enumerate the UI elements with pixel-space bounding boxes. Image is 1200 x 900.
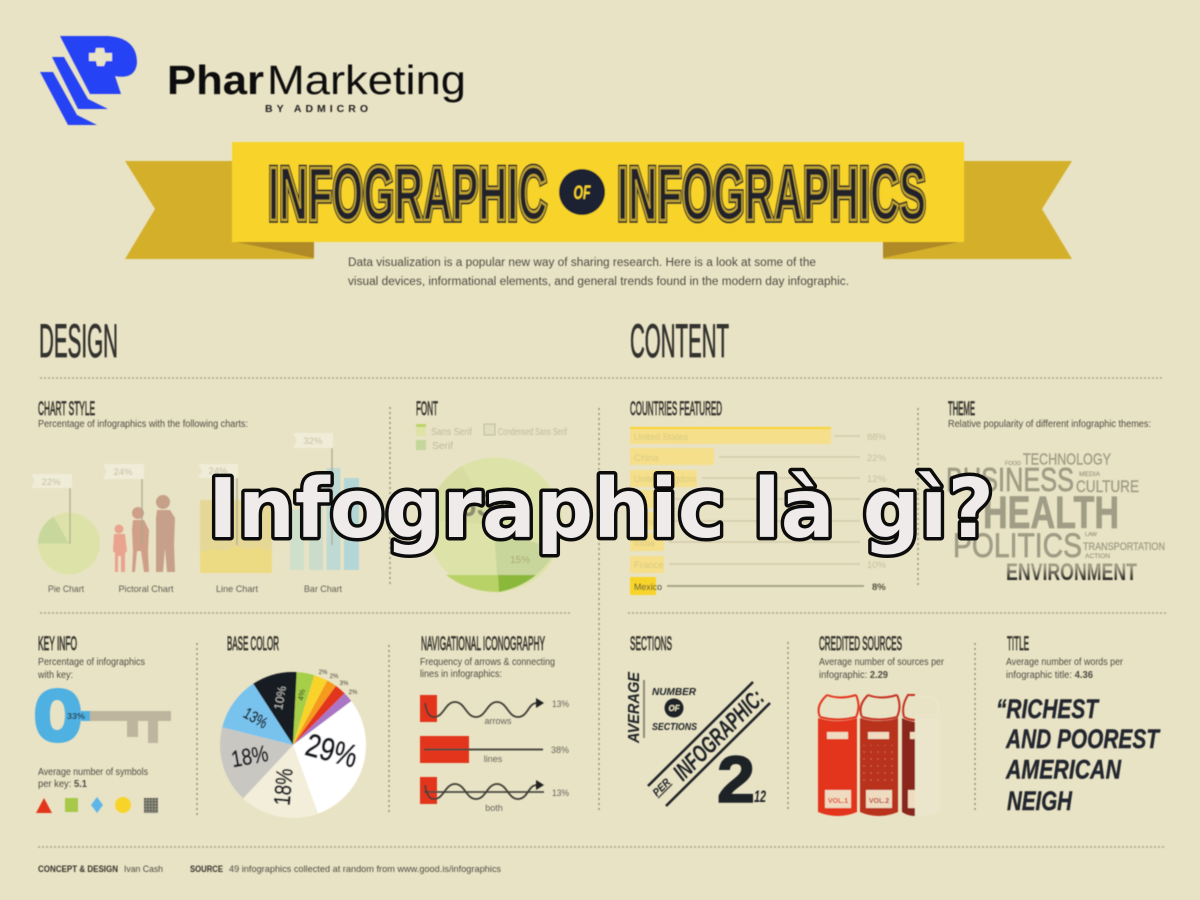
footer credits: Ivan Cash (124, 864, 163, 875)
bar: Canada: Canada (634, 517, 668, 528)
bar: Mexico: Mexico (634, 582, 662, 593)
bar: United States (630, 427, 887, 444)
line chart icon (198, 464, 272, 595)
icon: book vol 1: VOL.1 (828, 798, 848, 805)
bar chart icon: 32% (303, 436, 323, 447)
footer credits: 49 infographics collected at random from www.good.is/infographics (229, 864, 501, 875)
footer credits: CONCEPT & DESIGN (38, 864, 118, 875)
logo mark: PharMarketing (40, 36, 137, 125)
both row: both (485, 803, 503, 813)
panel: chart style: Percentage of infographics with the following charts: (38, 419, 248, 430)
icon: book vol 3 cut off (902, 695, 915, 816)
bar: India: India (634, 538, 655, 549)
icon: key: 33% (67, 712, 85, 721)
bar: hidden row (630, 490, 860, 508)
panel: credited sources: infographic: 2.29 (819, 670, 888, 681)
bar: China (630, 448, 887, 465)
bar: India (630, 533, 887, 551)
logo wordmark (167, 57, 466, 115)
bar: France (630, 556, 887, 573)
panel: key info: Average number of symbols (38, 767, 148, 778)
panel: chart style: CHART STYLE (38, 399, 95, 420)
pie chart icon (31, 474, 100, 595)
lines row: 38% (551, 745, 570, 756)
pie chart icon: 22% (41, 477, 61, 488)
base color pie chart: 18% (269, 767, 298, 806)
panel: font: FONT (416, 399, 438, 420)
bar: India: 10% (867, 538, 887, 549)
pictorial chart icon: Pictoral Chart (118, 584, 174, 595)
infographic artwork: CONTENT (630, 314, 729, 367)
panel: navigational iconography: Frequency of arrows & connecting (420, 657, 555, 668)
panel: theme word cloud: FOOD (1005, 461, 1021, 467)
panel: theme word cloud: CULTURE (1076, 477, 1139, 496)
typographic lockup: average sections: AVERAGE (626, 671, 643, 744)
bar: Mexico: 8% (872, 582, 886, 593)
panel: base color: BASE COLOR (227, 634, 279, 655)
font legend: Sans Serif (431, 427, 472, 438)
bar chart icon: Bar Chart (304, 584, 342, 595)
panel: key info: with key: (37, 670, 73, 681)
arrows row (420, 695, 569, 726)
bar: Mexico (630, 577, 886, 595)
typographic lockup: average sections (626, 671, 770, 816)
pie chart icon: Pie Chart (48, 584, 84, 595)
pictorial chart icon (103, 464, 175, 595)
panel: theme word cloud: HEALTH (983, 487, 1119, 538)
base color pie chart: 29% (302, 726, 361, 775)
footer credits (38, 864, 501, 875)
bar: France: 10% (867, 560, 887, 571)
overlay headline: Infographic là gì? (208, 462, 994, 557)
footer credits: SOURCE (190, 864, 223, 875)
bar: Canada (630, 512, 860, 530)
panel: navigational iconography: lines in infographics: (420, 669, 502, 680)
panel: theme word cloud: Relative popularity of different infographic themes: (948, 419, 1151, 430)
base color pie chart: 2% (330, 674, 339, 680)
intro text: visual devices, informational elements, and general trends found in the modern day infographic. (348, 276, 849, 288)
font legend (416, 424, 567, 452)
panel: theme word cloud: TECHNOLOGY (1023, 452, 1111, 468)
typographic lockup: average sections: .12 (751, 787, 766, 806)
bar: United States: 88% (867, 432, 887, 443)
icon: book vol 1 (818, 695, 858, 816)
line chart icon: Line Chart (216, 584, 258, 595)
panel: sections: SECTIONS (630, 634, 672, 655)
panel: base color (220, 634, 366, 818)
quote: AND POOREST (1005, 724, 1161, 754)
panel: key info: per key: 5.1 (38, 779, 87, 790)
logo wordmark: Phar (167, 57, 264, 103)
bar: United Kingdom: United Kingdom (634, 474, 696, 485)
base color pie chart: 13% (240, 705, 270, 732)
font pie chart: 15% (510, 555, 530, 566)
quote (996, 694, 1161, 816)
title: Infographic of Infographics: INFOGRAPHIC (268, 152, 547, 237)
font legend: Condensed Sans Serif (498, 427, 567, 438)
panel: key info: KEY INFO (38, 634, 77, 655)
typographic lockup: average sections: 2 (717, 742, 755, 816)
base color pie chart: 2% (349, 690, 358, 696)
quote: “RICHEST (996, 694, 1100, 724)
panel: theme word cloud: THEME (948, 399, 975, 420)
base color pie chart: 4% (296, 688, 307, 701)
lines row: lines (484, 754, 503, 764)
font pie chart: 65% (460, 487, 520, 523)
base color pie chart: 2% (319, 670, 328, 676)
panel: key info (35, 634, 171, 813)
intro text (348, 257, 849, 288)
base color pie chart: 18% (229, 740, 270, 772)
logo wordmark: Marketing (267, 57, 466, 103)
panel: title words: TITLE (1007, 634, 1029, 655)
panel: theme word cloud (946, 399, 1165, 586)
font pie chart (428, 458, 562, 592)
logo wordmark: BY ADMICRO (265, 103, 368, 115)
panel: theme word cloud: ENVIRONMENT (1006, 559, 1137, 586)
typographic lockup: average sections: SECTIONS (652, 722, 697, 733)
panel: theme word cloud: BUSINESS (946, 461, 1074, 498)
panel: countries featured (630, 399, 887, 595)
panel: chart style (31, 399, 359, 595)
panel: theme word cloud: POLITICS (953, 527, 1082, 565)
panel: theme word cloud: ACTION (1085, 554, 1110, 560)
panel: sections (626, 634, 770, 816)
title: Infographic of Infographics: INFOGRAPHICS (617, 152, 926, 237)
pictorial chart icon: 24% (113, 467, 133, 478)
panel: countries featured: COUNTRIES FEATURED (630, 399, 722, 420)
ribbon banner (125, 142, 1072, 259)
font legend: Serif (432, 441, 453, 452)
panel: credited sources: CREDITED SOURCES (819, 634, 902, 655)
bar: China: 22% (867, 453, 887, 464)
panel: title words: infographic title: 4.36 (1006, 670, 1093, 681)
title: Infographic of Infographics: INFOGRAPHICS (617, 152, 926, 237)
bar: United Kingdom: 12% (867, 474, 887, 485)
panel: theme word cloud: MEDIA (1079, 472, 1100, 478)
bar: China: China (634, 453, 660, 464)
panel: title words: Average number of words per (1006, 657, 1124, 668)
icon: key (35, 688, 171, 743)
quote: AMERICAN (1005, 754, 1121, 784)
icon: book vol 2 (860, 695, 900, 816)
typographic lockup: average sections: PER (651, 776, 673, 799)
arrows row: arrows (484, 716, 512, 726)
bar chart icon (290, 433, 359, 595)
panel: title words (996, 634, 1161, 816)
panel: theme word cloud: LAW (1085, 532, 1097, 538)
base color pie chart: 3% (340, 681, 349, 687)
panel: navigational iconography (420, 634, 570, 813)
panel: credited sources: Average number of sources per (819, 657, 945, 668)
base color pie chart: 10% (271, 684, 289, 711)
bar: United States: United States (634, 432, 688, 443)
intro text: Data visualization is a popular new way of sharing research. Here is a look at some of the (348, 257, 816, 269)
panel: theme word cloud: TRANSPORTATION (1083, 541, 1165, 553)
symbols row (36, 797, 158, 813)
quote: NEIGH (1007, 786, 1072, 816)
typographic lockup: average sections: INFOGRAPHIC: (668, 684, 770, 786)
base color pie chart (220, 670, 366, 818)
panel: key info: Percentage of infographics (38, 657, 145, 668)
arrows row: 13% (552, 699, 569, 710)
bar: United Kingdom (630, 470, 887, 487)
infographic artwork: DESIGN (39, 314, 118, 367)
lines row (420, 736, 570, 764)
icon: book vol 2: VOL.2 (869, 798, 889, 805)
both row: 13% (552, 788, 569, 799)
panel: credited sources (818, 634, 945, 817)
title: Infographic of Infographics: OF (574, 183, 591, 204)
icon: faded book (915, 697, 940, 817)
panel: navigational iconography: NAVIGATIONAL ICONOGRAPHY (421, 634, 545, 655)
typographic lockup: average sections: NUMBER (652, 687, 697, 698)
panel: font (416, 399, 567, 592)
both row (420, 777, 569, 813)
line chart icon: 24% (208, 466, 228, 477)
title: Infographic of Infographics: INFOGRAPHIC (268, 152, 547, 237)
bar: France: France (634, 560, 664, 571)
typographic lockup: average sections: OF (668, 704, 681, 713)
